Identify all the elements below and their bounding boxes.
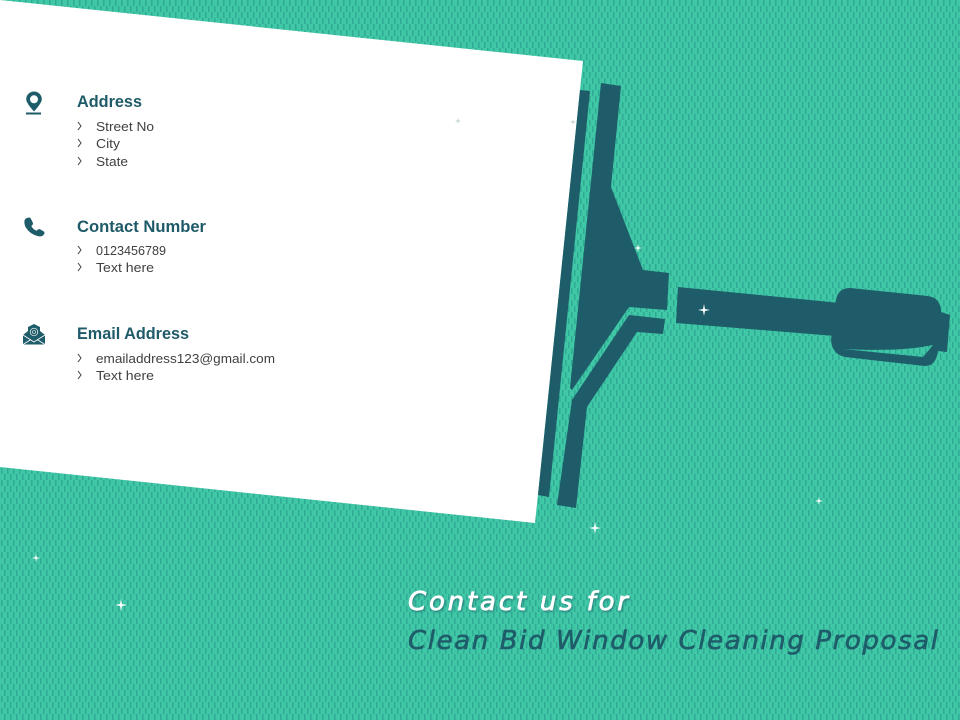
title (408, 587, 939, 656)
list: address lines: City (96, 136, 121, 151)
list: email lines: emailaddress123@gmail.com (96, 351, 275, 366)
icon: squeegee (538, 83, 950, 508)
block: contact number (24, 217, 206, 275)
heading: email address: Email Address (77, 324, 189, 343)
heading: address: Address (77, 92, 142, 111)
panel: white window pane (0, 0, 583, 523)
icon: location pin (26, 92, 42, 114)
list: address lines (78, 119, 154, 169)
list: email lines: Text here (96, 368, 154, 383)
list: contact lines: Text here (96, 260, 154, 275)
block: email address (23, 324, 275, 383)
list: address lines: State (96, 154, 128, 169)
title line: proposal name: Clean Bid Window Cleaning Proposal (408, 626, 939, 656)
title line: contact us for: Contact us for (408, 587, 630, 617)
icon: open envelope (23, 324, 45, 344)
list: contact lines (78, 243, 166, 275)
list: contact lines: 0123456789 (96, 243, 166, 258)
list: address lines: Street No (96, 119, 154, 134)
icon: sparkles (32, 118, 823, 611)
icon: phone (24, 218, 44, 236)
heading: contact number: Contact Number (77, 217, 206, 236)
list: email lines (78, 351, 275, 383)
block: address (26, 92, 154, 169)
